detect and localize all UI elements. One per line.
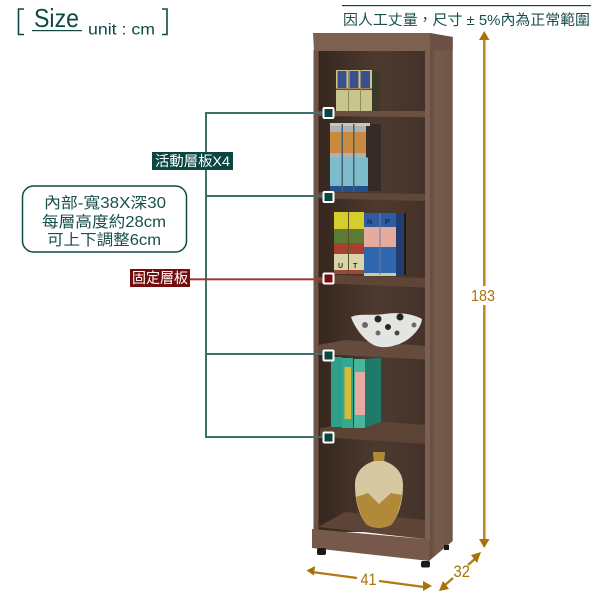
tolerance note: 因人工丈量，尺寸 ± 5%內為正常範圍 [343, 11, 590, 29]
books third shelf: P [385, 219, 390, 226]
books top shelf [336, 70, 380, 111]
marker: adjustable shelf 3 [324, 350, 334, 360]
fruit bowl [351, 313, 422, 347]
callout: interior dimensions: 可上下調整6cm [47, 231, 161, 249]
feet [317, 548, 326, 555]
marker: fixed shelf [324, 274, 334, 284]
bookshelf [312, 33, 453, 568]
top cap [313, 33, 430, 51]
height value: 183 [471, 288, 495, 305]
shelf right post [425, 50, 430, 540]
ceramic vase [355, 452, 403, 528]
callout: interior dimensions: 內部-寬38X深30 [44, 194, 166, 212]
shelf board 5 [320, 421, 425, 444]
width value: 41 [360, 571, 376, 589]
books third shelf [334, 212, 406, 276]
title: Size unit cm [18, 3, 167, 38]
callout: interior dimensions: 每層高度約28cm [42, 213, 166, 231]
depth value: 32 [454, 563, 470, 581]
marker: adjustable shelf 4 [324, 432, 334, 442]
depth dimension arrow [439, 552, 481, 591]
shelf board 1 [318, 111, 425, 117]
shelf left post [314, 50, 318, 532]
red line: fixed shelf [189, 278, 324, 280]
label: fixed shelf: 固定層板 [132, 270, 188, 287]
shelf board 2 [318, 192, 425, 201]
books third shelf: N [367, 219, 372, 226]
marker: adjustable shelf 1 [324, 108, 334, 118]
plinth base [312, 529, 430, 561]
shelf board 3 [318, 275, 425, 288]
teal bracket lines: adjustable shelves [206, 113, 324, 437]
shelf side panel [429, 33, 453, 561]
books third shelf: U [338, 263, 343, 270]
width dimension arrow [306, 566, 432, 591]
height dimension arrow [471, 31, 495, 548]
books fourth shelf [331, 357, 381, 428]
shelf interior back [318, 50, 425, 532]
interior floor [318, 512, 425, 539]
marker: adjustable shelf 2 [324, 192, 334, 202]
callout: interior dimensions [22, 186, 186, 252]
label: adjustable shelves x4: 活動層板X4 [155, 153, 230, 169]
title: Size unit cm: unit : cm [88, 22, 155, 38]
title: Size unit cm: Size [34, 3, 79, 33]
books second shelf [330, 123, 381, 192]
books third shelf: T [353, 263, 358, 270]
shelf board 4 [318, 340, 425, 360]
